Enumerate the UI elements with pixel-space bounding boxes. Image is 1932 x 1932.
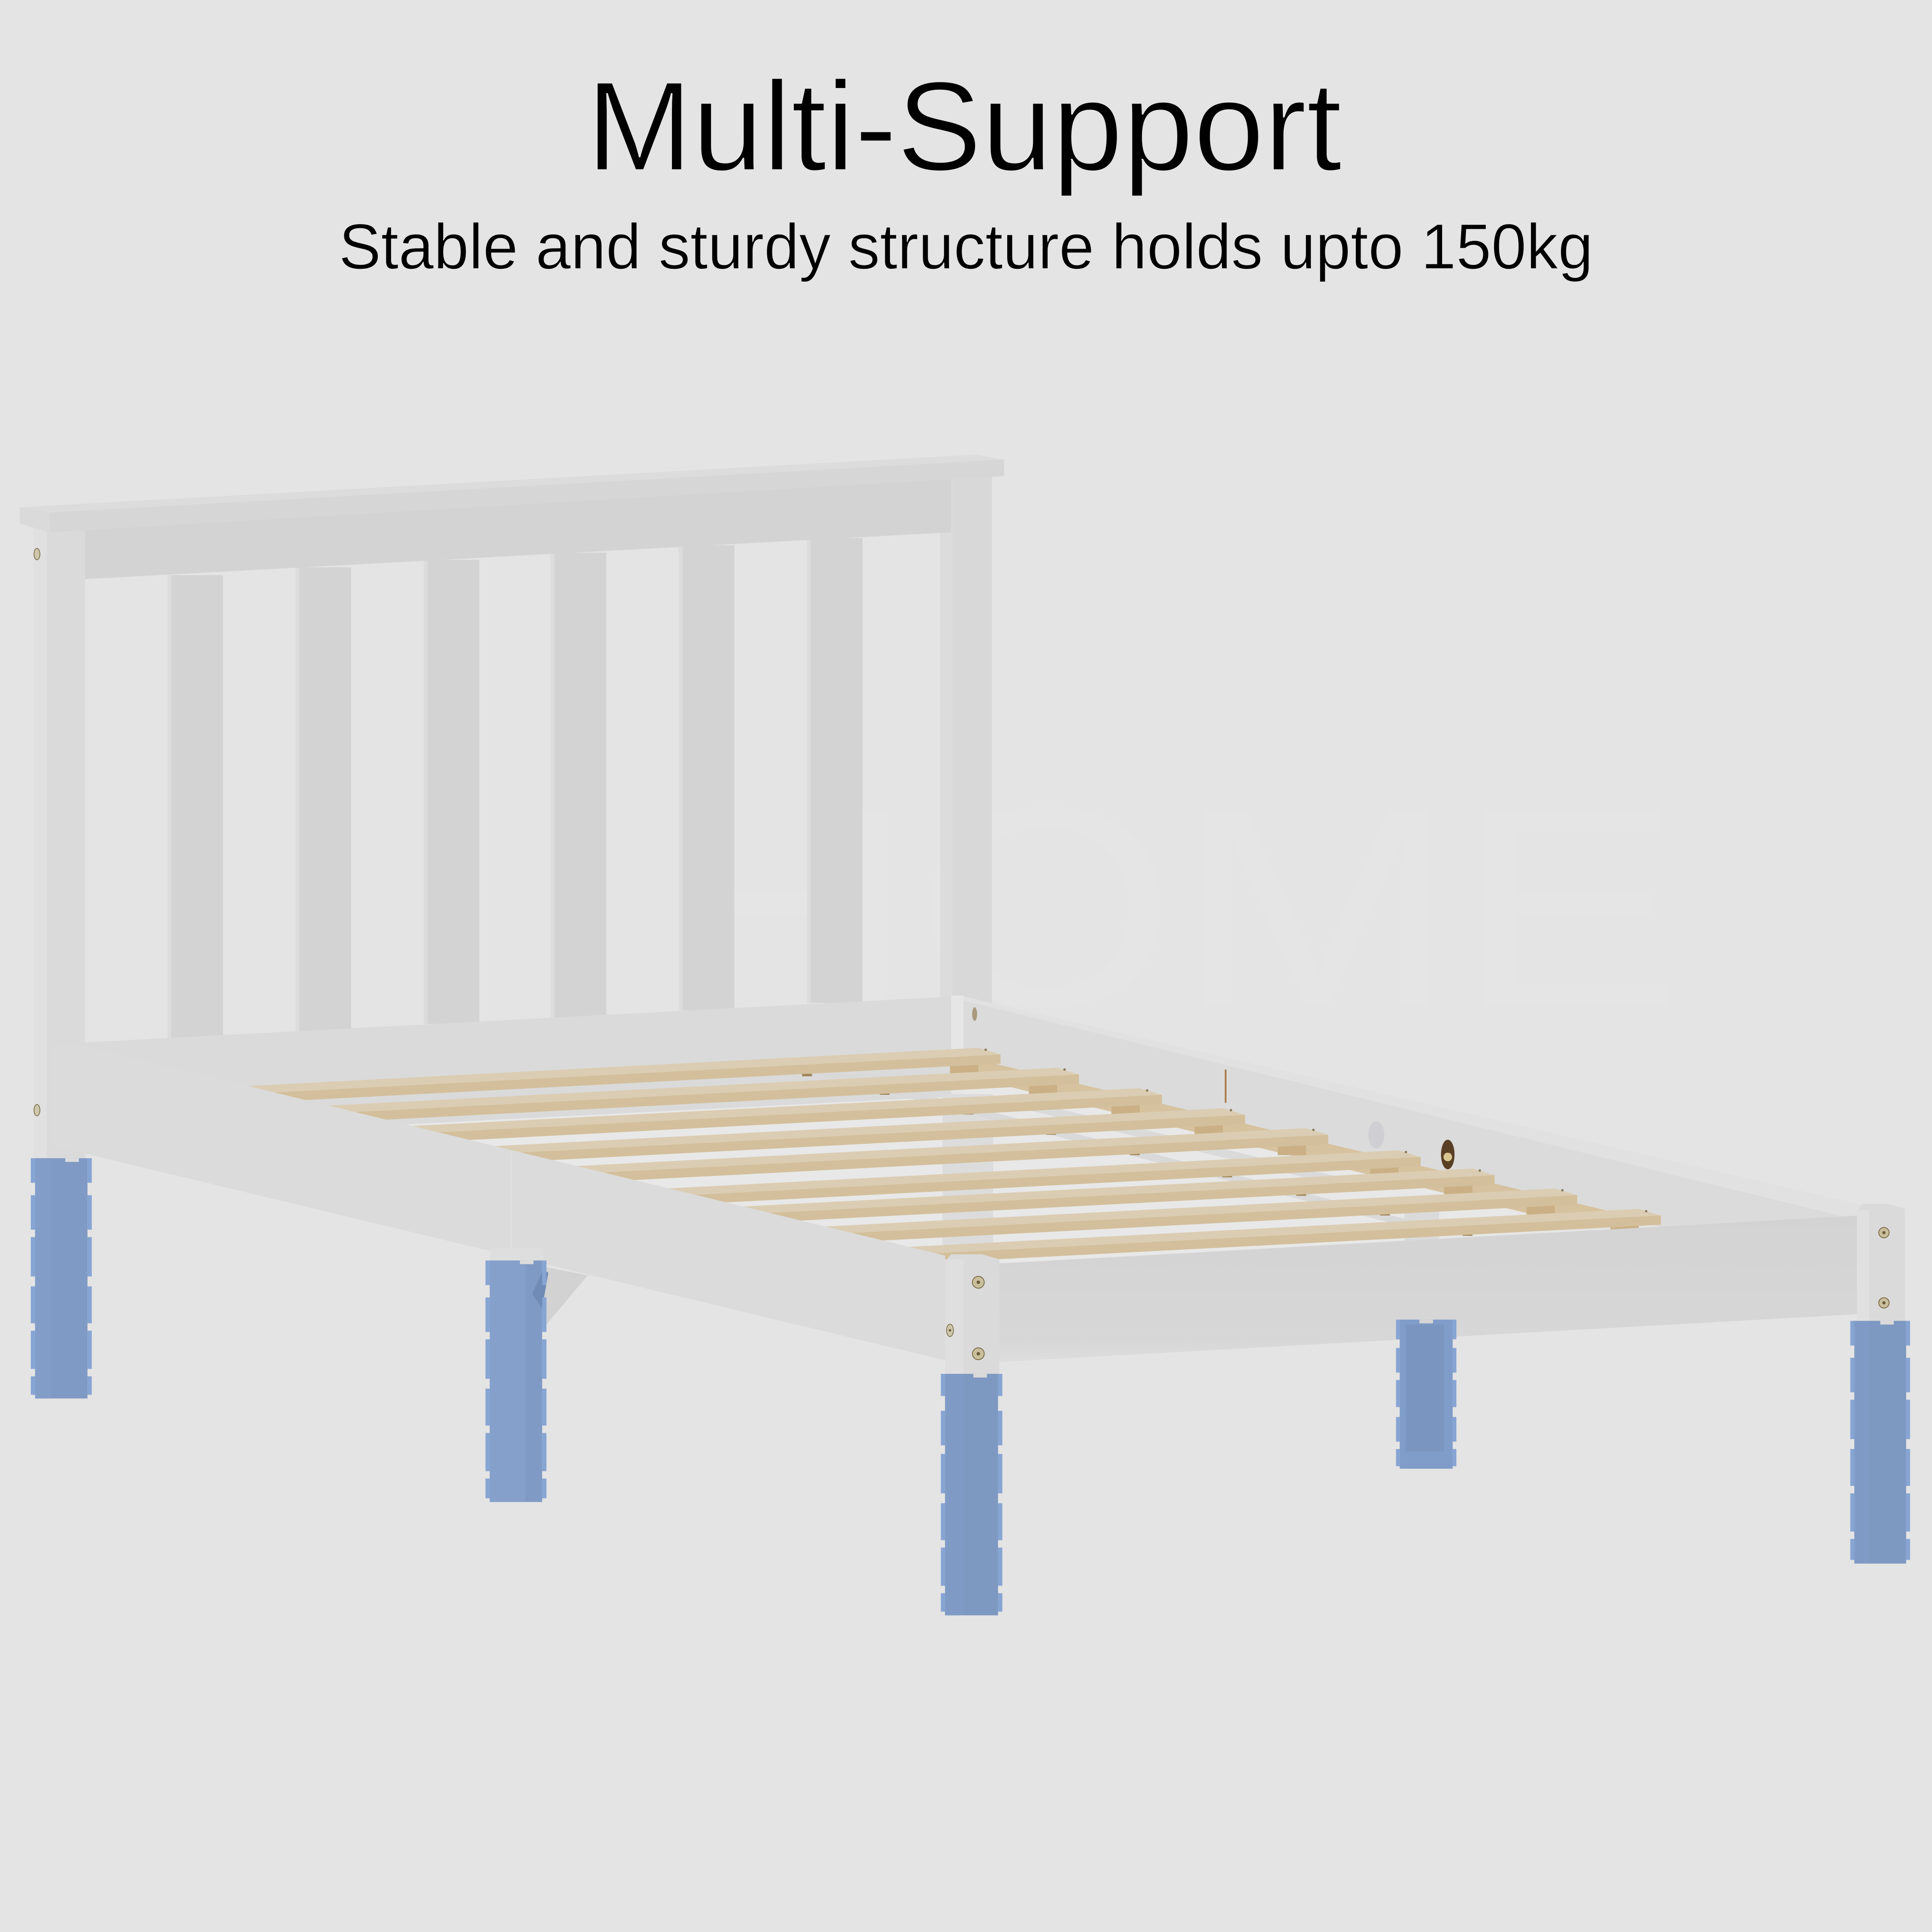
bed illustration [20, 455, 1905, 1378]
headboard upper rail [85, 476, 951, 579]
bed floor gap [370, 1069, 1661, 1264]
highlighted leg: rear right [1396, 1320, 1456, 1469]
screws [34, 548, 1889, 1360]
nut hole [1441, 1140, 1455, 1170]
title: Multi-Support [586, 55, 1342, 198]
screw hole [972, 1007, 977, 1021]
headboard [20, 455, 1004, 1158]
slat underside marks [802, 1074, 1473, 1236]
highlighted leg: rear left [31, 1158, 92, 1398]
right post lower section [942, 1094, 993, 1255]
headboard top cap [20, 455, 1004, 532]
highlighted leg: middle [486, 1261, 548, 1502]
wooden slats [221, 1048, 1661, 1265]
headboard left post [33, 527, 85, 1158]
watermark: HOME [671, 748, 1682, 1066]
side rail inner face [963, 996, 1863, 1227]
center beam [813, 1069, 1442, 1232]
ledge support blocks [950, 1064, 1639, 1232]
cross brace [1031, 1106, 1355, 1185]
corner strip [951, 996, 963, 1097]
subtitle: Stable and sturdy structure holds upto 150kg [339, 211, 1593, 283]
wood ledge [949, 1062, 1661, 1228]
under-bed structure [813, 1069, 1442, 1255]
highlighted leg: front corner [941, 1374, 1002, 1615]
foot rail [999, 1215, 1862, 1362]
headboard lower rail [85, 996, 951, 1126]
rear leg post [1405, 1210, 1439, 1242]
slat nails [984, 1048, 1647, 1212]
highlighted leg: far corner [1850, 1321, 1910, 1564]
headboard slats [167, 538, 863, 1039]
middle leg stub [490, 1248, 544, 1263]
far corner post [1857, 1204, 1905, 1324]
headboard right post [940, 476, 992, 1008]
diagonal brace [544, 1267, 588, 1328]
front corner post [945, 1255, 999, 1378]
round hole [1368, 1121, 1384, 1148]
side rail outer face [53, 1046, 945, 1360]
long screw [1225, 1069, 1226, 1103]
